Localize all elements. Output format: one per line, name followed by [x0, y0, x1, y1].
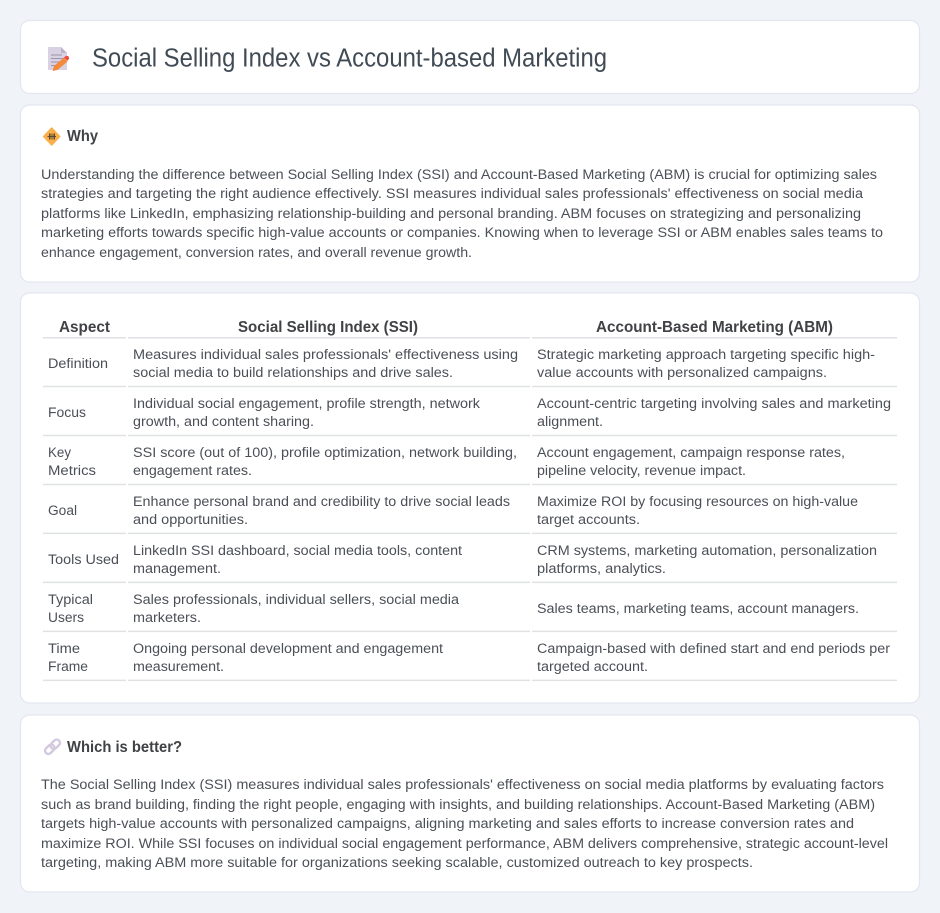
row: time frame: measurement.	[133, 659, 224, 675]
row: key metrics: SSI score (out of 100), profile optimization, network building,	[133, 445, 517, 461]
row: time frame: Frame	[48, 659, 88, 675]
row: typical users: Sales teams, marketing teams, account managers.	[537, 601, 859, 617]
row: tools used: management.	[133, 561, 221, 577]
table header row	[43, 319, 897, 338]
row: tools used: LinkedIn SSI dashboard, social media tools, content	[133, 543, 462, 559]
row: tools used: Tools Used	[48, 552, 119, 568]
text block: why explanation: platforms like LinkedIn, emphasizing relationship-building and personal branding. ABM focuses on strategizing and personalizing	[41, 206, 861, 222]
row: key metrics: Account engagement, campaign response rates,	[537, 445, 845, 461]
row: goal: Goal	[48, 503, 77, 519]
text block: which is better explanation	[41, 777, 888, 871]
row: tools used: CRM systems, marketing automation, personalization	[537, 543, 877, 559]
row: key metrics	[43, 445, 897, 484]
panel: which is better	[20, 715, 920, 892]
row: focus: Account-centric targeting involving sales and marketing	[537, 396, 891, 412]
row: typical users: Sales professionals, individual sellers, social media	[133, 592, 459, 608]
row: time frame	[43, 641, 897, 680]
row: goal: Maximize ROI by focusing resources on high-value	[537, 494, 858, 510]
row: definition: Strategic marketing approach targeting specific high-	[537, 347, 875, 363]
row: typical users: marketers.	[133, 610, 201, 626]
row: definition: Measures individual sales professionals' effectiveness using	[133, 347, 518, 363]
row: tools used: platforms, analytics.	[537, 561, 666, 577]
row: goal	[43, 494, 897, 533]
row: typical users: Typical	[48, 592, 93, 608]
row: key metrics: Key	[48, 445, 72, 461]
row: time frame: Ongoing personal development and engagement	[133, 641, 443, 657]
text block: which is better explanation: targets high-value accounts with personalized campaigns, aligning marketing and sales efforts to increase conversion rates and	[41, 816, 854, 832]
text block: why explanation: strategies and targeting the right audience effectively. SSI measures individual sales professionals' effectiveness on social media	[41, 186, 863, 202]
row: typical users	[43, 592, 897, 631]
row: focus: alignment.	[537, 414, 603, 430]
row: focus: growth, and content sharing.	[133, 414, 314, 430]
text block: why explanation: enhance engagement, conversion rates, and overall revenue growth.	[41, 245, 472, 261]
table header row: Social Selling Index (SSI)	[238, 319, 418, 336]
row: focus: Focus	[48, 405, 86, 421]
panel: comparison table	[20, 293, 920, 703]
row: focus: Individual social engagement, profile strength, network	[133, 396, 481, 412]
title: Social Selling Index vs Account-based Marketing	[92, 44, 607, 72]
text block: which is better explanation: The Social Selling Index (SSI) measures individual sales professionals' effectiveness on social media platforms by evaluating factors	[41, 777, 884, 793]
text block: why explanation	[41, 167, 883, 261]
row: definition	[43, 347, 897, 386]
row: time frame: targeted account.	[537, 659, 648, 675]
row: tools used	[43, 543, 897, 582]
table header row: Aspect	[59, 319, 111, 336]
panel: title header	[20, 20, 920, 94]
row: key metrics: pipeline velocity, revenue impact.	[537, 463, 746, 479]
icon: warning diamond	[44, 128, 60, 145]
row: definition: social media to build relationships and drive sales.	[133, 365, 453, 381]
row: goal: Enhance personal brand and credibility to drive social leads	[133, 494, 510, 510]
heading: why: Why	[67, 128, 98, 145]
text block: which is better explanation: targeting, making ABM more suitable for organizations seeking scalable, customized outreach to key prospects.	[41, 855, 753, 871]
table header row: Account-Based Marketing (ABM)	[596, 319, 833, 336]
row: key metrics: Metrics	[48, 463, 96, 479]
text block: which is better explanation: maximize ROI. While SSI focuses on individual social engagement performance, ABM delivers comprehensive, strategic account-level	[41, 836, 888, 852]
row: goal: target accounts.	[537, 512, 640, 528]
text block: which is better explanation: such as brand building, finding the right people, engaging with insights, and building relationships. Account-Based Marketing (ABM)	[41, 797, 875, 813]
row: definition: Definition	[48, 356, 108, 372]
row: goal: and opportunities.	[133, 512, 248, 528]
row: definition: value accounts with personalized campaigns.	[537, 365, 827, 381]
row: time frame: Time	[48, 641, 80, 657]
row: typical users: Users	[48, 610, 84, 626]
icon: chain link	[44, 738, 61, 755]
heading: which is better: Which is better?	[67, 739, 182, 756]
row: time frame: Campaign-based with defined start and end periods per	[537, 641, 890, 657]
row: key metrics: engagement rates.	[133, 463, 252, 479]
text block: why explanation: Understanding the difference between Social Selling Index (SSI) and Account-Based Marketing (ABM) is crucial for optimizing sales	[41, 167, 877, 183]
panel: why	[20, 105, 920, 282]
text block: why explanation: marketing efforts towards specific high-value accounts or companies. Knowing when to leverage SSI or ABM enables sales teams to	[41, 225, 883, 241]
icon: memo with pencil	[48, 47, 69, 71]
row: focus	[43, 396, 897, 436]
